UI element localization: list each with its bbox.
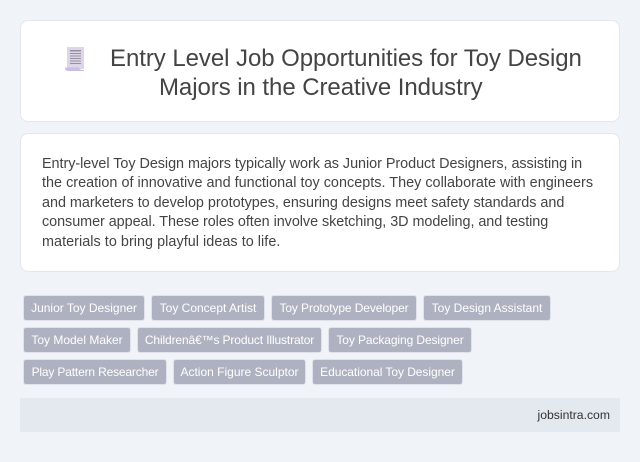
- title: [110, 45, 582, 101]
- description text: materials to bring playful ideas to life.: [42, 234, 280, 250]
- tag: [151, 295, 265, 321]
- tag: [23, 359, 167, 385]
- tag: Toy Packaging Designer: [336, 333, 464, 347]
- tag: [173, 359, 306, 385]
- tag: Toy Model Maker: [31, 333, 123, 347]
- title: Entry Level Job Opportunities for Toy Design: [110, 45, 582, 72]
- tag: Action Figure Sculptor: [180, 365, 299, 379]
- tag: Toy Prototype Developer: [279, 301, 409, 315]
- icon: paper scroll: [65, 47, 84, 71]
- title: Majors in the Creative Industry: [159, 74, 483, 101]
- tag: Play Pattern Researcher: [32, 365, 158, 379]
- tag: [328, 327, 472, 353]
- footer bar: [20, 398, 620, 432]
- tag: [312, 359, 463, 385]
- tag: [137, 327, 322, 353]
- footer source text: jobsintra.com: [538, 408, 610, 422]
- tag: [423, 295, 551, 321]
- description text: Entry-level Toy Design majors typically work as Junior Product Designers, assisting in: [42, 156, 582, 172]
- tag: [271, 295, 417, 321]
- description text: consumer appeal. These roles often involve sketching, 3D modeling, and testing: [42, 214, 548, 230]
- tag: Toy Design Assistant: [432, 301, 542, 315]
- tag: [23, 295, 145, 321]
- tag: Educational Toy Designer: [320, 365, 455, 379]
- tag: Childrenâ€™s Product Illustrator: [145, 333, 314, 347]
- description text: [42, 156, 593, 250]
- tag: Toy Concept Artist: [160, 301, 256, 315]
- job tags: [23, 295, 551, 385]
- panel: title card: [20, 20, 620, 122]
- tag: [23, 327, 131, 353]
- description text: and marketers to develop prototypes, ensuring designs meet safety standards and: [42, 195, 564, 211]
- description text: the creation of innovative and functional toy concepts. They collaborate with engineers: [42, 175, 593, 191]
- tag: Junior Toy Designer: [31, 301, 137, 315]
- panel: description card: [20, 133, 620, 272]
